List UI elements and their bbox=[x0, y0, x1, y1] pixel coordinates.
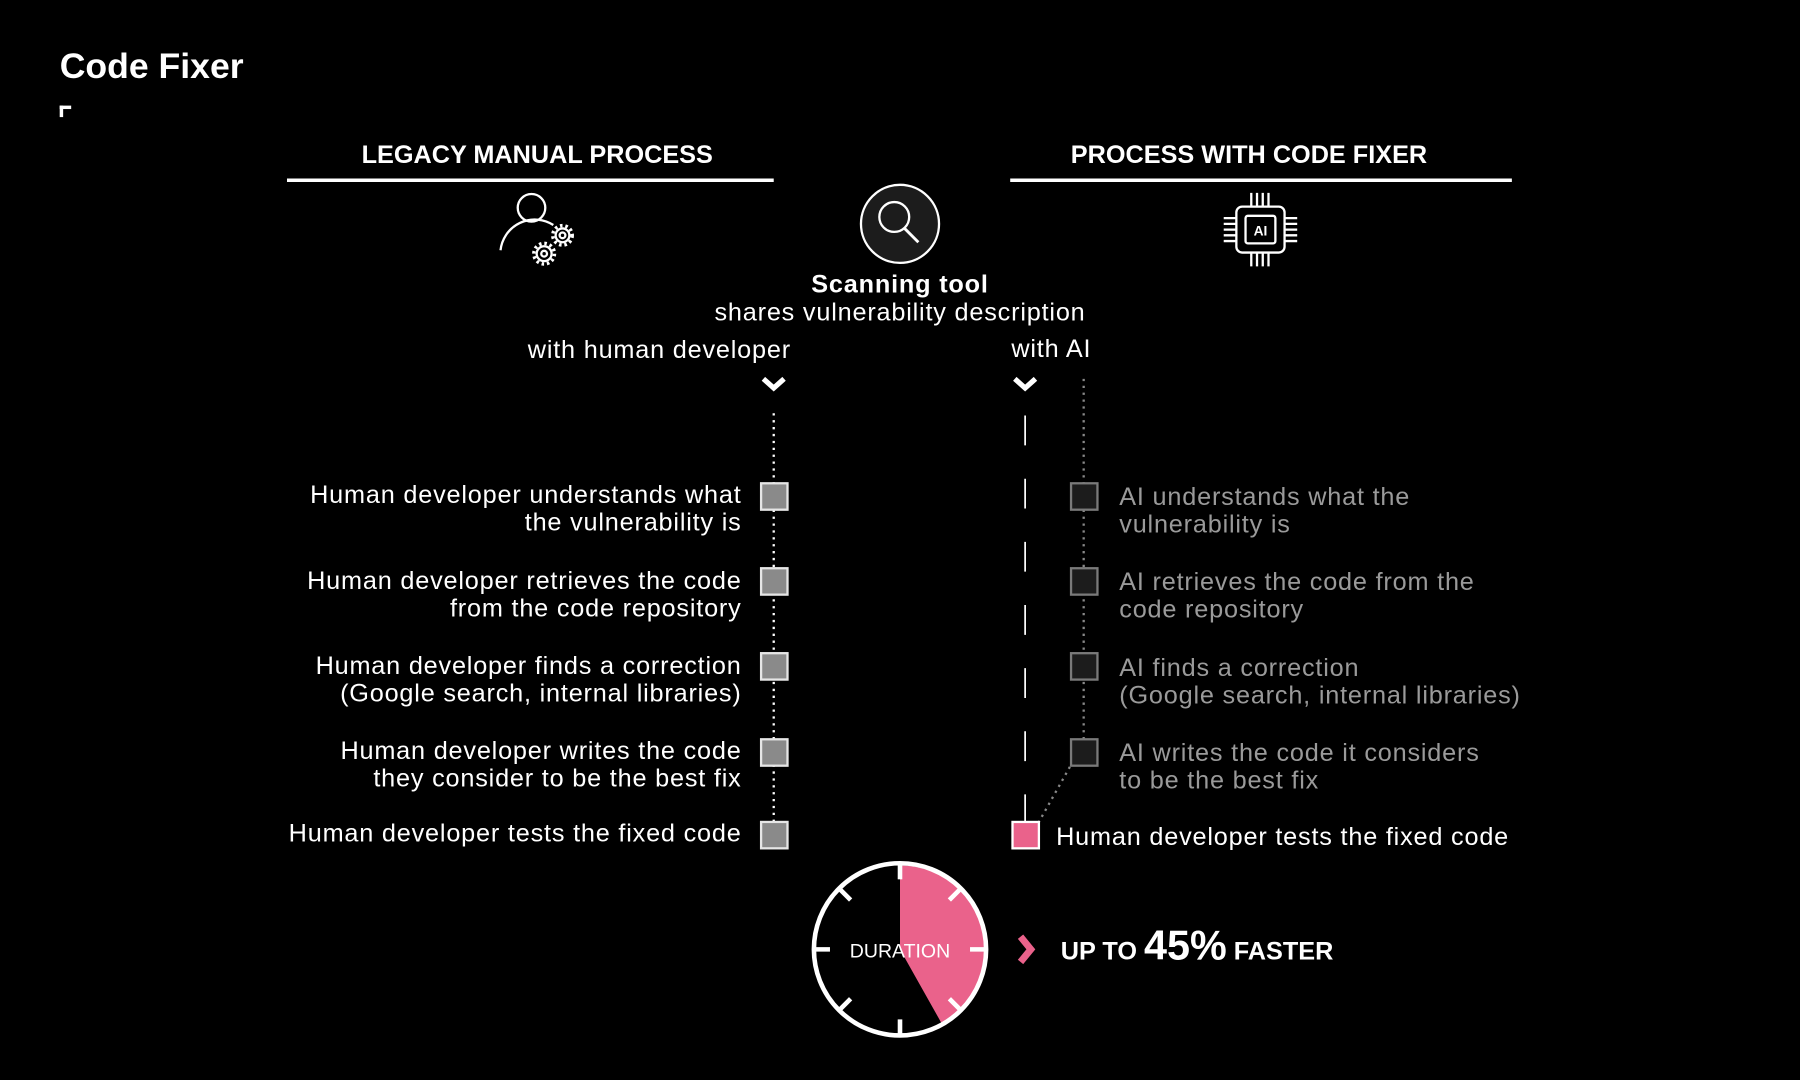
corner mark bbox=[60, 106, 71, 117]
left steps: the vulnerability is bbox=[525, 507, 742, 536]
scanning tool text: shares vulnerability description bbox=[714, 297, 1086, 326]
text: Human developer writes the code bbox=[340, 736, 742, 765]
icon: person with gears bbox=[501, 194, 572, 264]
scanning tool text: Scanning tool bbox=[811, 270, 989, 298]
text: they consider to be the best fix bbox=[373, 763, 742, 792]
right steps bbox=[1119, 482, 1410, 538]
heading: legacy: LEGACY MANUAL PROCESS bbox=[362, 140, 713, 169]
chevrons bbox=[763, 379, 1035, 388]
left steps: Human developer understands what bbox=[310, 480, 742, 509]
text: Human developer finds a correction bbox=[316, 651, 742, 680]
right squares bbox=[1071, 483, 1097, 766]
text: to be the best fix bbox=[1119, 766, 1319, 794]
text: (Google search, internal libraries) bbox=[1119, 681, 1521, 709]
left dotted line bbox=[773, 413, 775, 822]
right dashed line bbox=[1024, 416, 1026, 822]
heading: code fixer: PROCESS WITH CODE FIXER bbox=[1071, 140, 1427, 169]
icon: AI chip: AI bbox=[1254, 223, 1267, 238]
text: code repository bbox=[1119, 595, 1304, 623]
right steps: vulnerability is bbox=[1119, 510, 1291, 538]
title: Code Fixer bbox=[60, 46, 244, 86]
right steps: AI understands what the bbox=[1119, 482, 1410, 511]
text: from the code repository bbox=[450, 593, 742, 622]
icon: scanning magnifier bbox=[861, 185, 939, 263]
text: AI writes the code it considers bbox=[1119, 738, 1480, 767]
text: (Google search, internal libraries) bbox=[340, 678, 742, 707]
scanning tool text bbox=[714, 270, 1086, 326]
clock: DURATION bbox=[850, 940, 950, 962]
result callout: UP TO 45% FASTER bbox=[1061, 922, 1333, 969]
text: AI retrieves the code from the bbox=[1119, 567, 1475, 596]
right dotted line bbox=[1083, 379, 1085, 739]
text: Human developer tests the fixed code bbox=[1056, 822, 1509, 851]
branch label left: with human developer bbox=[528, 335, 791, 364]
text: Human developer tests the fixed code bbox=[289, 818, 742, 847]
left squares bbox=[761, 483, 788, 848]
branch label right: with AI bbox=[1011, 334, 1091, 363]
clock bbox=[814, 863, 986, 1035]
pink arrow bbox=[1021, 937, 1031, 962]
text: AI finds a correction bbox=[1119, 653, 1359, 682]
left steps bbox=[310, 480, 742, 536]
pink square bbox=[1013, 822, 1039, 848]
text: Human developer retrieves the code bbox=[307, 566, 742, 595]
icon: AI chip bbox=[1224, 193, 1297, 266]
